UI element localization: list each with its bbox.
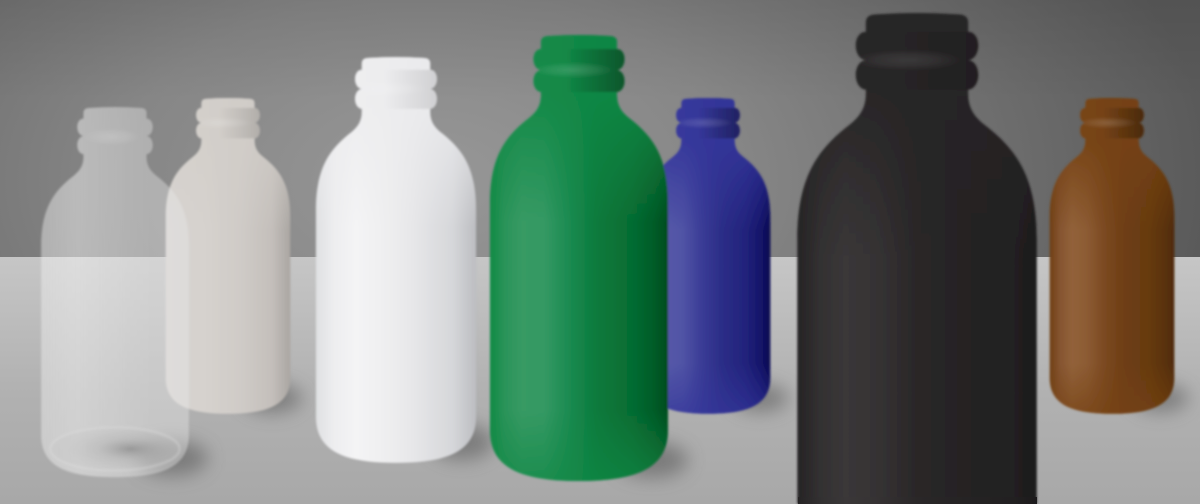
bottle: white [316, 57, 476, 463]
bottle: clear glass [41, 107, 189, 477]
shadows under bottles [136, 383, 1188, 478]
bottle: green [490, 35, 668, 481]
bottle: blue [662, 96, 772, 416]
bottle: beige [166, 98, 290, 414]
black bottle base strip [798, 497, 1037, 504]
floor [0, 257, 1200, 504]
bottle: black [797, 13, 1037, 504]
bottle: amber brown [1050, 98, 1174, 414]
background wall [0, 0, 1200, 258]
